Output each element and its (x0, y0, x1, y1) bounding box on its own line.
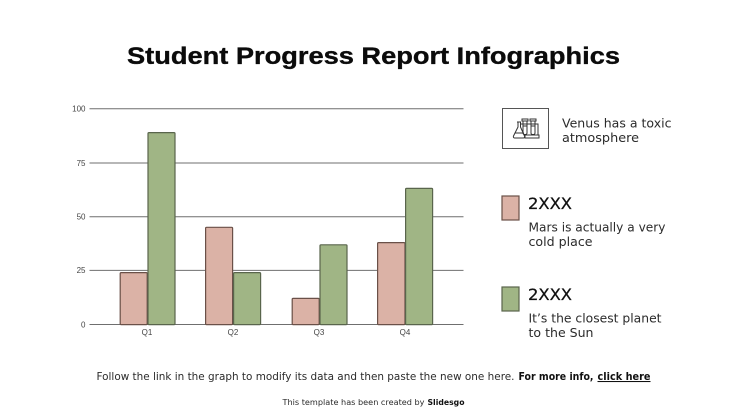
x-axis labels: Q1 (142, 328, 153, 337)
y-axis labels: 100 (72, 104, 86, 114)
footer note: Follow the link in the graph to modify its data and then paste the new one here. (96, 371, 514, 383)
x-axis labels: Q2 (228, 328, 239, 337)
bars: Q1 (120, 133, 175, 325)
legend: pink series (502, 194, 666, 249)
green description (528, 310, 662, 340)
green description: It’s the closest planet (528, 310, 662, 326)
x-axis labels: Q4 (400, 328, 411, 337)
pink swatch (502, 196, 519, 220)
text: Venus description: Venus has a toxic (562, 116, 672, 130)
pink heading: 2XXX (528, 194, 572, 213)
footer note: For more info, (518, 371, 594, 383)
pink description: Mars is actually a very (528, 220, 666, 234)
credit line: Slidesgo (428, 398, 465, 407)
green heading: 2XXX (528, 285, 572, 304)
footer note: click here (598, 371, 650, 383)
text: Venus description (562, 116, 672, 145)
green description: to the Sun (528, 325, 594, 340)
y-axis labels: 25 (77, 266, 86, 275)
bars: Q3 (292, 245, 347, 325)
title: Student Progress Report Infographics (127, 43, 620, 70)
icon: lab flask and test tubes (502, 108, 548, 148)
text: Venus description: atmosphere (562, 130, 639, 145)
y-axis labels (72, 104, 86, 329)
chart gridlines (90, 109, 464, 324)
bars: Q2 (206, 227, 261, 325)
y-axis labels: 50 (77, 212, 86, 222)
legend: green series (502, 285, 662, 340)
bar chart (72, 104, 464, 337)
credit line: This template has been created by (281, 398, 425, 407)
pink description (528, 220, 666, 249)
y-axis labels: 75 (77, 159, 86, 168)
x-axis labels: Q3 (314, 328, 325, 337)
y-axis labels: 0 (81, 320, 86, 329)
x-axis labels (142, 328, 411, 337)
pink description: cold place (528, 234, 593, 249)
green swatch (502, 287, 519, 311)
bars: Q4 (378, 188, 433, 325)
